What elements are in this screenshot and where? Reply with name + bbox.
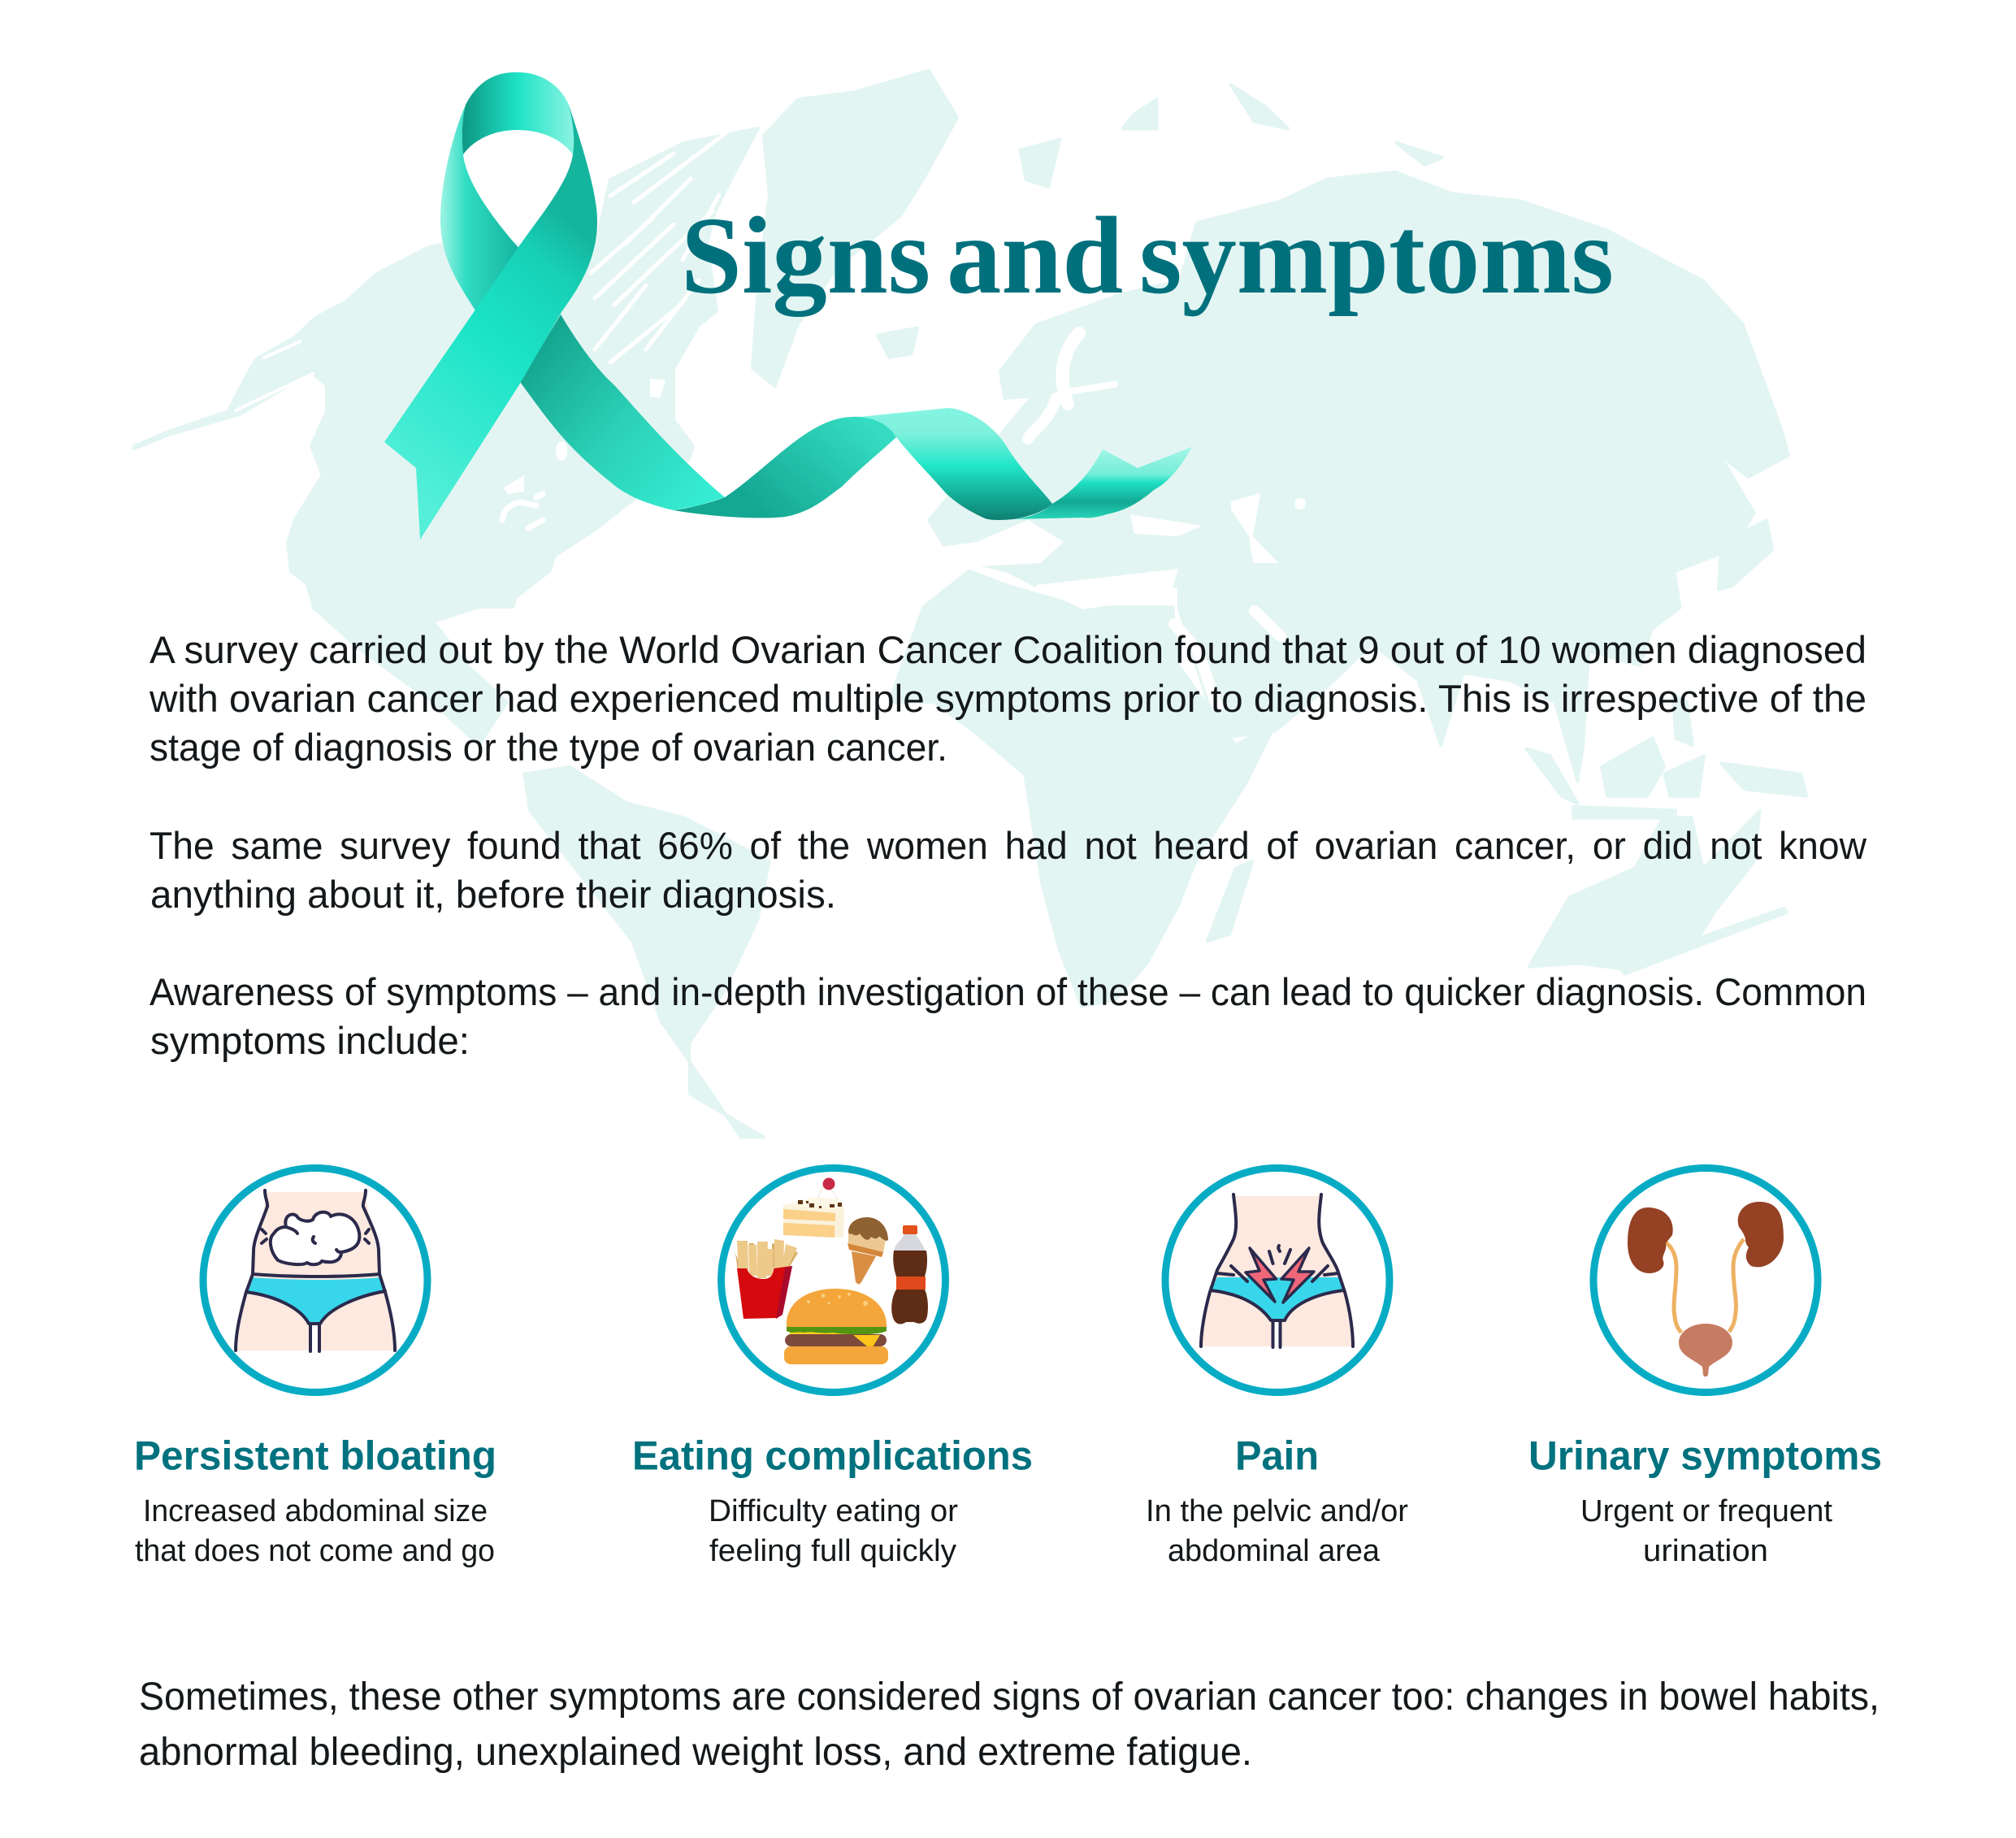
symptom: persistent bloating text: Persistent bloating (134, 1433, 496, 1479)
paragraph: 66% statistic (150, 824, 1867, 916)
symptom: persistent bloating text: Increased abdominal size (143, 1494, 488, 1528)
paragraph: 66% statistic: anything about it, before their diagnosis. (150, 873, 836, 916)
symptom: persistent bloating text (134, 1433, 496, 1568)
lightning bolts (1246, 1248, 1314, 1303)
paragraph: awareness (150, 970, 1866, 1062)
cake slice (783, 1178, 845, 1238)
burger (784, 1289, 888, 1364)
icon: pain (1165, 1168, 1390, 1393)
paragraph: survey finding: stage of diagnosis or the type of ovarian cancer. (150, 726, 947, 769)
paragraph: survey finding: A survey carried out by the World Ovarian Cancer Coalition found that 9 out of 10 women diagnosed (150, 628, 1866, 671)
symptom: eating complications text: Difficulty eating or (709, 1494, 958, 1528)
background world map (134, 71, 1806, 1137)
paragraph: survey finding: with ovarian cancer had experienced multiple symptoms prior to diagnosis. This is irrespective of the (149, 677, 1866, 720)
symptom: eating complications text: Eating complications (632, 1433, 1033, 1479)
paragraph: survey finding (149, 628, 1866, 769)
paragraph: awareness: Awareness of symptoms – and in-depth investigation of these – can lead to quicker diagnosis. Common (150, 970, 1866, 1013)
symptom: pain text (1146, 1433, 1408, 1568)
cola bottle (891, 1225, 928, 1324)
intro text block (149, 628, 1867, 1062)
icon: persistent bloating (203, 1168, 427, 1393)
title: Signs and symptoms (681, 195, 1614, 317)
ice cream cone (848, 1217, 888, 1285)
closing text: abnormal bleeding, unexplained weight loss, and extreme fatigue. (139, 1731, 1252, 1774)
sea cut-outs and island cracks (504, 379, 1306, 609)
symptom: urinary symptoms text: urination (1643, 1534, 1768, 1568)
symptom: persistent bloating text: that does not come and go (135, 1534, 495, 1568)
icon: urinary symptoms (1593, 1168, 1818, 1393)
symptom: pain text: In the pelvic and/or (1146, 1494, 1408, 1528)
symptom: urinary symptoms text: Urgent or frequent (1580, 1494, 1832, 1528)
symptom: eating complications text: feeling full quickly (709, 1534, 956, 1568)
fries (735, 1239, 798, 1319)
closing text (139, 1675, 1879, 1774)
symptom: urinary symptoms text: Urinary symptoms (1528, 1433, 1882, 1479)
symptom: urinary symptoms text (1528, 1433, 1882, 1568)
paragraph: awareness: symptoms include: (150, 1019, 470, 1062)
closing text: Sometimes, these other symptoms are considered signs of ovarian cancer too: changes in bowel habits, (139, 1675, 1879, 1719)
symptom: pain text: Pain (1235, 1433, 1319, 1479)
ribbon (384, 72, 1192, 540)
symptom: pain text: abdominal area (1168, 1534, 1381, 1568)
symptom: eating complications text (632, 1433, 1033, 1568)
paragraph: 66% statistic: The same survey found that 66% of the women had not heard of ovarian cancer, or did not know (150, 824, 1867, 867)
icon: eating complications (722, 1168, 946, 1393)
